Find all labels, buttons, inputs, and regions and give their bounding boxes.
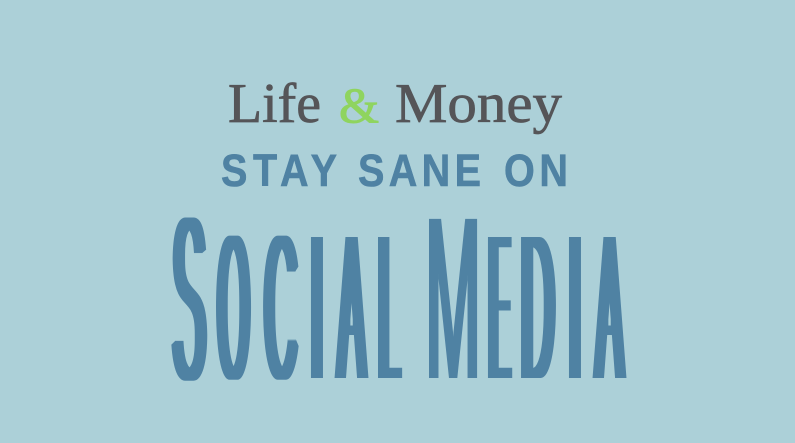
word: edia: E bbox=[490, 189, 510, 427]
logo: Life & Money bbox=[228, 73, 562, 135]
subtitle: Stay Sane On bbox=[221, 146, 568, 196]
word: edia: A bbox=[596, 188, 623, 427]
word: edia: D bbox=[521, 187, 554, 427]
word: Social: O bbox=[218, 190, 249, 427]
main title: Social Media bbox=[173, 165, 623, 433]
word: edia: I bbox=[569, 187, 581, 427]
word: Social: A bbox=[338, 188, 365, 427]
subtitle: Stay Sane On: STAY bbox=[221, 146, 337, 196]
word: Social: L bbox=[379, 189, 399, 427]
subtitle: Stay Sane On: SANE bbox=[358, 146, 481, 196]
logo: Life & Money: Life bbox=[228, 73, 321, 135]
word: Social bbox=[173, 165, 399, 433]
word: Social: I bbox=[311, 187, 323, 427]
logo: Life & Money: Money bbox=[395, 73, 562, 135]
word: edia bbox=[490, 187, 623, 427]
logo: Life & Money: & bbox=[339, 77, 379, 133]
word: Social: S bbox=[173, 165, 206, 433]
word: Social: C bbox=[265, 190, 297, 426]
subtitle: Stay Sane On: ON bbox=[504, 146, 568, 196]
letter: M: M bbox=[426, 166, 480, 433]
